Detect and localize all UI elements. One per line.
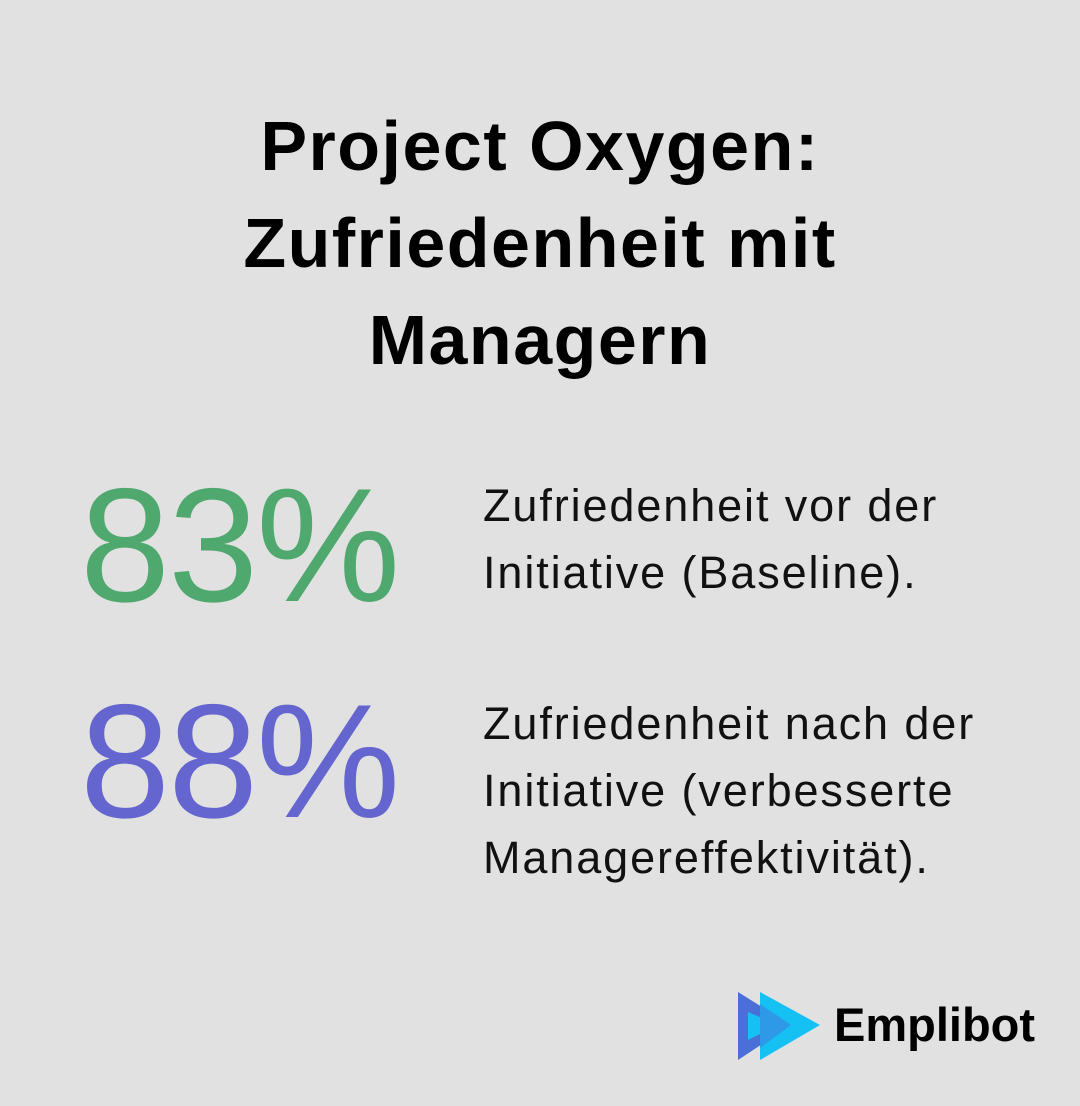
title: Project Oxygen:	[260, 107, 820, 185]
description: after: Managereffektivität).	[483, 832, 930, 883]
stat: 83%: 83%	[80, 455, 398, 636]
brand name: Emplibot	[834, 998, 1035, 1051]
description: after: Initiative (verbesserte	[483, 765, 954, 816]
logo	[738, 992, 1035, 1060]
title: Managern	[369, 301, 711, 379]
description: before: Zufriedenheit vor der	[483, 480, 938, 531]
title	[243, 107, 837, 379]
description: before	[483, 480, 938, 598]
icon: play triangles	[738, 992, 820, 1060]
description: after: Zufriedenheit nach der	[483, 698, 975, 749]
description: before: Initiative (Baseline).	[483, 547, 917, 598]
description: after	[483, 698, 975, 883]
stat: 88%: 88%	[80, 671, 398, 852]
title: Zufriedenheit mit	[243, 204, 837, 282]
